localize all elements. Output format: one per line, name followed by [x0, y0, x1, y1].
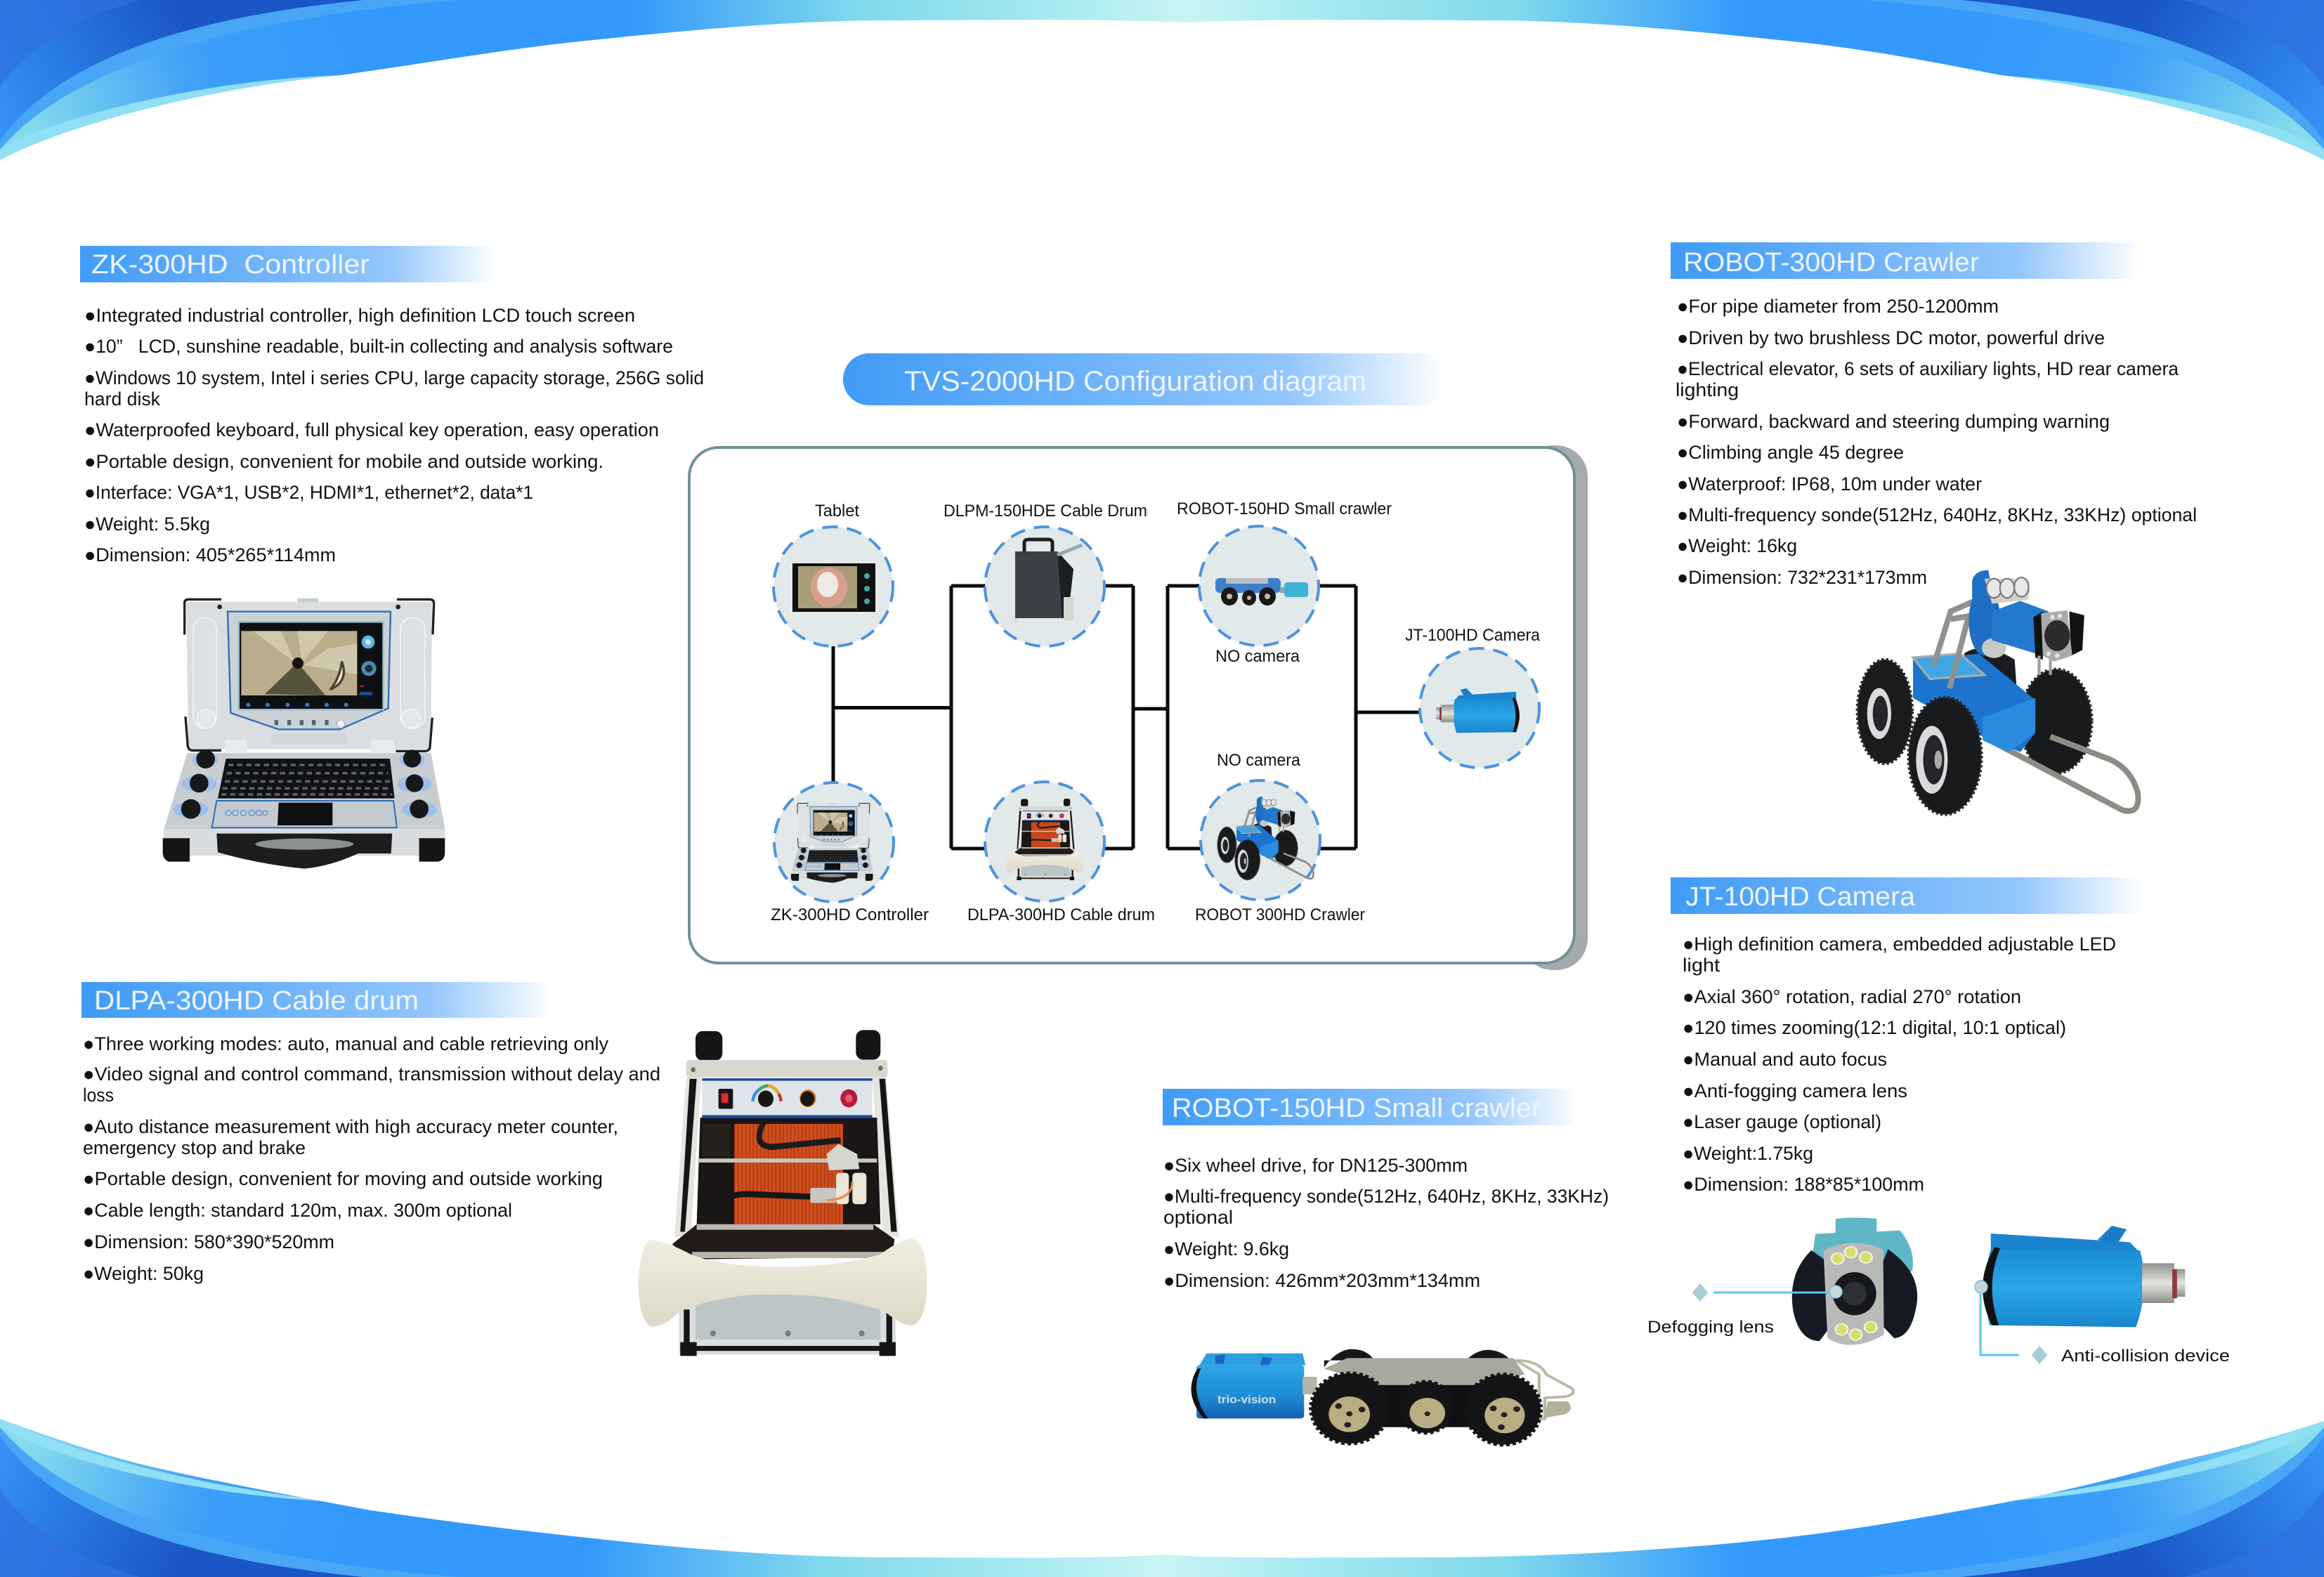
text block: ROBOT-300HD specifications: ●Electrical elevator, 6 sets of auxiliary lights, HD rear camera: [1677, 358, 2179, 379]
text block: ROBOT-300HD specifications: ●Multi-frequency sonde(512Hz, 640Hz, 8KHz, 33KHz) optional: [1677, 504, 2197, 525]
node: ROBOT-150HD Small crawler: [1177, 499, 1392, 666]
product photo: ZK-300HD controller: [163, 598, 445, 869]
text block: ROBOT-300HD specifications: ●For pipe diameter from 250-1200mm: [1677, 296, 1999, 317]
text block: JT-100HD specifications: [1683, 934, 2116, 1195]
text block: ZK-300HD specifications: ●Integrated industrial controller, high definition LCD touch screen: [84, 305, 635, 326]
text block: ROBOT-150HD specifications: [1163, 1155, 1609, 1291]
text block: DLPA-300HD specifications: ●Weight: 50kg: [83, 1263, 204, 1284]
text block: DLPA-300HD specifications: ●Dimension: 580*390*520mm: [83, 1231, 334, 1252]
text block: JT-100HD specifications: light: [1683, 955, 1721, 976]
callout: Defogging lens: Defogging lens: [1647, 1318, 1774, 1337]
node: ROBOT 300HD Crawler: [1195, 751, 1365, 924]
text block: DLPA-300HD specifications: ●Auto distance measurement with high accuracy meter counter,: [83, 1116, 618, 1137]
text block: ROBOT-300HD specifications: ●Forward, backward and steering dumping warning: [1677, 411, 2110, 432]
node: Tablet: Tablet: [815, 502, 859, 521]
text block: DLPA-300HD specifications: ●Cable length: standard 120m, max. 300m optional: [83, 1200, 512, 1221]
node: DLPA-300HD Cable drum: [967, 782, 1155, 924]
product photo: ROBOT-150HD small crawler: trio-vision: [1218, 1393, 1276, 1406]
heading: ROBOT-150HD Small crawler: ROBOT-150HD Small crawler: [1172, 1094, 1541, 1123]
product photo: DLPA-300HD cable drum: [638, 1030, 927, 1356]
text block: DLPA-300HD specifications: ●Video signal and control command, transmission without delay and: [83, 1064, 660, 1085]
callout: Defogging lens: [1647, 1283, 1842, 1337]
text block: ZK-300HD specifications: ●Portable design, convenient for mobile and outside working.: [84, 451, 603, 472]
text block: DLPA-300HD specifications: ●Three working modes: auto, manual and cable retrieving only: [83, 1033, 608, 1054]
node: ZK-300HD Controller: ZK-300HD Controller: [771, 905, 929, 924]
text block: JT-100HD specifications: ●Manual and auto focus: [1683, 1049, 1887, 1070]
heading: JT-100HD Camera: [1671, 877, 2142, 914]
heading: TVS-2000HD Configuration diagram: TVS-2000HD Configuration diagram: [904, 366, 1366, 397]
connection lines: [833, 586, 1421, 849]
text block: ZK-300HD specifications: ●Weight: 5.5kg: [84, 513, 210, 535]
node: DLPM-150HDE Cable Drum: [944, 502, 1147, 646]
text block: JT-100HD specifications: ●120 times zooming(12:1 digital, 10:1 optical): [1683, 1017, 2066, 1038]
text block: ROBOT-300HD specifications: lighting: [1676, 379, 1739, 400]
callout: Anti-collision device: Anti-collision device: [2061, 1347, 2230, 1366]
text block: DLPA-300HD specifications: [83, 1033, 660, 1284]
callout: Anti-collision device: [1975, 1281, 2230, 1366]
node: JT-100HD Camera: JT-100HD Camera: [1405, 626, 1540, 645]
text block: ZK-300HD specifications: ●Windows 10 system, Intel i series CPU, large capacity storage, 256G solid: [84, 367, 704, 388]
node: ROBOT-150HD Small crawler: NO camera: [1215, 647, 1300, 666]
heading: TVS-2000HD Configuration diagram: [843, 353, 1446, 405]
top wave banner: [0, 0, 2324, 183]
text block: ZK-300HD specifications: ●Interface: VGA*1, USB*2, HDMI*1, ethernet*2, data*1: [84, 482, 533, 503]
text block: ZK-300HD specifications: [84, 305, 704, 565]
node: Tablet: [773, 502, 893, 646]
text block: ROBOT-300HD specifications: ●Weight: 16kg: [1677, 535, 1797, 556]
text block: ROBOT-300HD specifications: [1676, 296, 2197, 588]
heading: ZK-300HD Controller: [80, 246, 496, 282]
node: ROBOT 300HD Crawler: NO camera: [1217, 751, 1300, 770]
product photo: ROBOT-300HD crawler: [1858, 570, 2138, 814]
text block: ZK-300HD specifications: ●Dimension: 405*265*114mm: [84, 544, 336, 565]
heading: DLPA-300HD Cable drum: DLPA-300HD Cable drum: [94, 986, 419, 1016]
text block: JT-100HD specifications: ●Dimension: 188*85*100mm: [1683, 1174, 1924, 1195]
heading: JT-100HD Camera: JT-100HD Camera: [1685, 882, 1916, 912]
text block: ROBOT-150HD specifications: optional: [1163, 1207, 1233, 1228]
heading: DLPA-300HD Cable drum: [81, 982, 552, 1018]
text block: JT-100HD specifications: ●Laser gauge (optional): [1683, 1111, 1881, 1132]
text block: ROBOT-300HD specifications: ●Driven by two brushless DC motor, powerful drive: [1677, 327, 2105, 348]
text block: ROBOT-150HD specifications: ●Dimension: 426mm*203mm*134mm: [1163, 1270, 1480, 1291]
node: ZK-300HD Controller: [771, 783, 929, 924]
text block: ROBOT-150HD specifications: ●Multi-frequency sonde(512Hz, 640Hz, 8KHz, 33KHz): [1163, 1186, 1609, 1207]
bottom wave banner: [0, 1394, 2324, 1577]
text block: JT-100HD specifications: ●Weight:1.75kg: [1683, 1143, 1813, 1164]
text block: DLPA-300HD specifications: loss: [83, 1085, 114, 1106]
text block: DLPA-300HD specifications: ●Portable design, convenient for moving and outside working: [83, 1168, 603, 1189]
text block: ZK-300HD specifications: hard disk: [84, 388, 160, 410]
node: ROBOT 300HD Crawler: ROBOT 300HD Crawler: [1195, 905, 1365, 924]
heading: ROBOT-150HD Small crawler: [1163, 1089, 1579, 1125]
text block: ROBOT-300HD specifications: ●Waterproof: IP68, 10m under water: [1677, 473, 1982, 495]
text block: JT-100HD specifications: ●Anti-fogging camera lens: [1683, 1080, 1907, 1101]
node: ROBOT-150HD Small crawler: ROBOT-150HD Small crawler: [1177, 499, 1392, 518]
text block: JT-100HD specifications: ●High definition camera, embedded adjustable LED: [1683, 934, 2116, 955]
text block: ROBOT-150HD specifications: ●Weight: 9.6kg: [1163, 1238, 1289, 1259]
text block: ROBOT-150HD specifications: ●Six wheel drive, for DN125-300mm: [1163, 1155, 1468, 1176]
heading: ROBOT-300HD Crawler: [1671, 242, 2141, 279]
product photo: JT-100HD camera side: [1983, 1226, 2185, 1327]
text block: ROBOT-300HD specifications: ●Dimension: 732*231*173mm: [1677, 567, 1927, 588]
heading: ROBOT-300HD Crawler: ROBOT-300HD Crawler: [1683, 248, 1979, 277]
panel: configuration diagram: [689, 445, 1588, 970]
node: DLPM-150HDE Cable Drum: DLPM-150HDE Cable Drum: [944, 502, 1147, 521]
heading: ZK-300HD Controller: ZK-300HD Controller: [91, 250, 370, 280]
product photo: ROBOT-150HD small crawler: [1192, 1349, 1573, 1445]
text block: DLPA-300HD specifications: emergency stop and brake: [83, 1137, 306, 1158]
node: JT-100HD Camera: [1405, 626, 1540, 768]
text block: JT-100HD specifications: ●Axial 360° rotation, radial 270° rotation: [1683, 986, 2021, 1007]
product photo: JT-100HD camera front: [1792, 1217, 1917, 1345]
text block: ROBOT-300HD specifications: ●Climbing angle 45 degree: [1677, 442, 1904, 463]
text block: ZK-300HD specifications: ●Waterproofed keyboard, full physical key operation, easy operation: [84, 419, 659, 440]
text block: ZK-300HD specifications: ●10” LCD, sunshine readable, built-in collecting and analysis software: [84, 336, 673, 357]
node: DLPA-300HD Cable drum: DLPA-300HD Cable drum: [967, 905, 1155, 924]
